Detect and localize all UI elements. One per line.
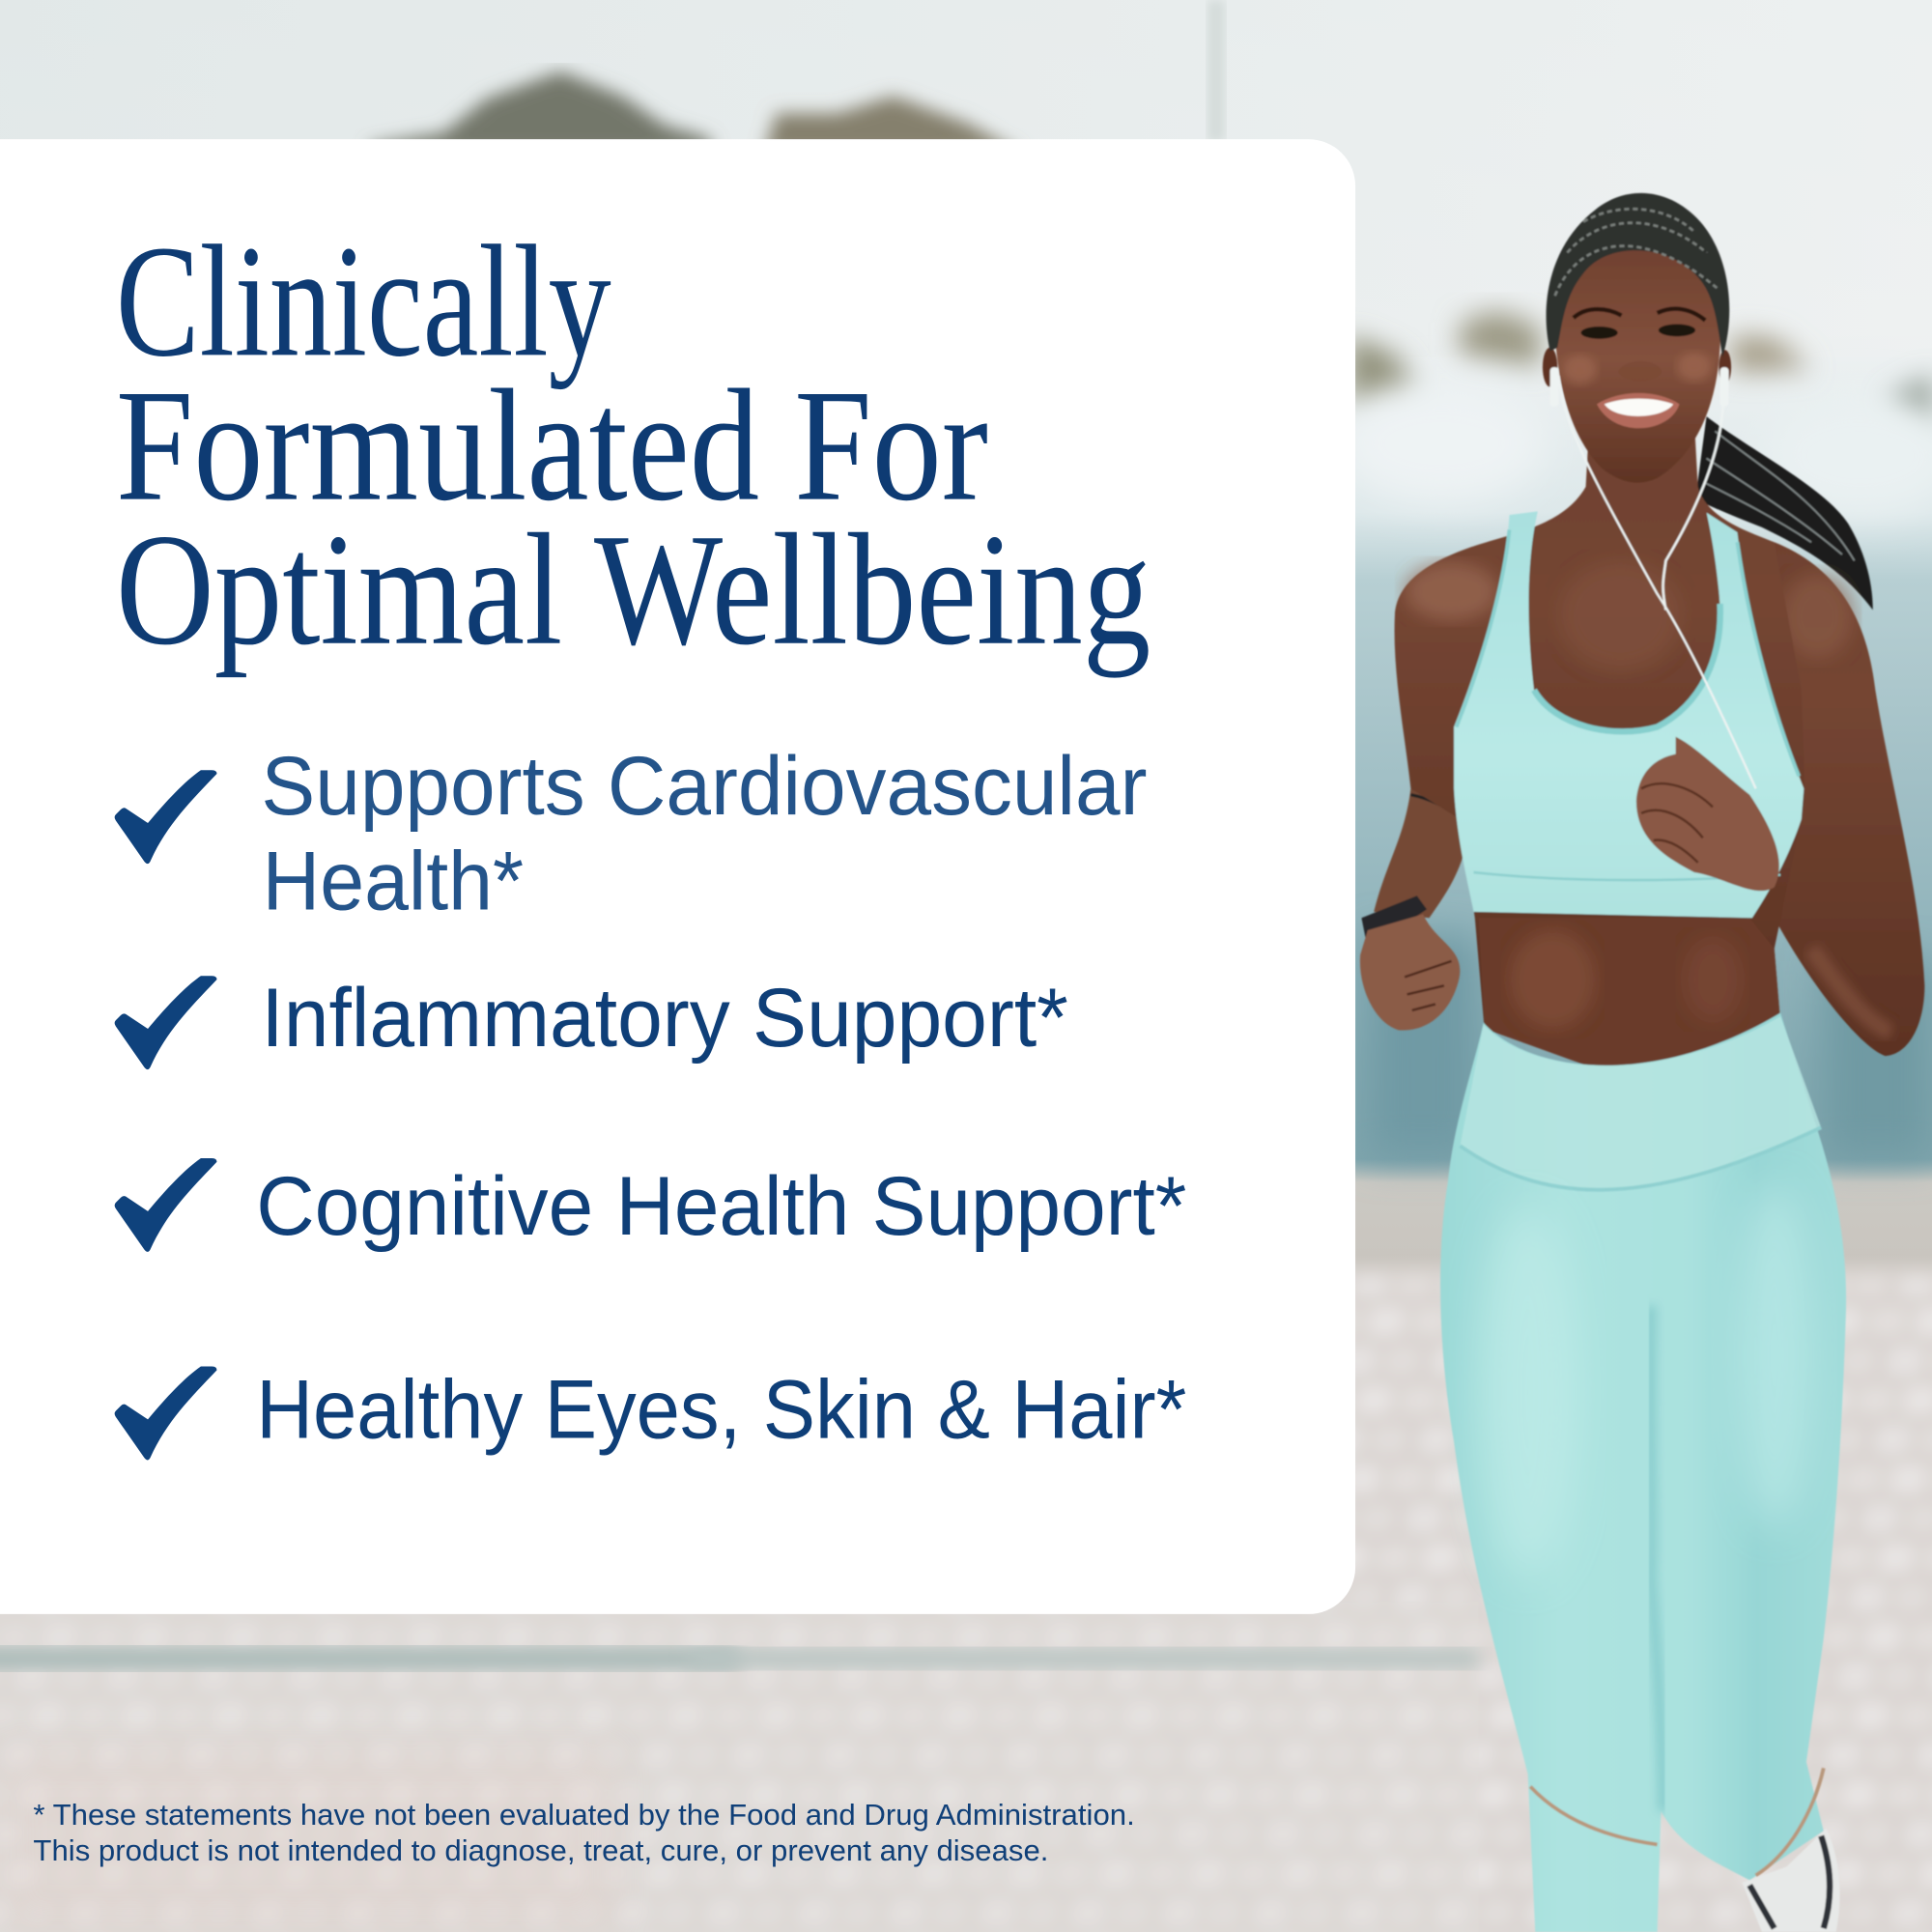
smile — [1597, 393, 1680, 428]
benefit: cardiovascular: Supports Cardiovascular — [261, 739, 1147, 833]
heading — [116, 212, 1151, 678]
near arm — [1707, 542, 1924, 1056]
benefit: eyes skin hair: Healthy Eyes, Skin & Hair* — [256, 1363, 1186, 1457]
footnote disclaimer: This product is not intended to diagnose, treat, cure, or prevent any disease. — [33, 1834, 1048, 1867]
benefit: cardiovascular line 2: Health* — [263, 834, 524, 927]
torso and midriff — [1395, 419, 1805, 1084]
running shoe — [1743, 1829, 1839, 1932]
earphone wires — [1550, 367, 1756, 788]
nose — [1618, 361, 1662, 382]
heading: Clinically — [116, 212, 611, 389]
footnote disclaimer: * These statements have not been evaluated by the Food and Drug Administration. — [33, 1799, 1135, 1832]
near hand fist — [1636, 737, 1779, 891]
eyes, brows — [1574, 309, 1705, 321]
icon: check mark 2 — [115, 976, 216, 1069]
benefit: cognitive: Cognitive Health Support* — [256, 1159, 1186, 1253]
far arm and fist — [1360, 788, 1468, 1031]
photo: woman jogging — [1360, 193, 1924, 1932]
leggings — [1440, 1012, 1846, 1932]
heading: Formulated For — [116, 356, 988, 534]
icon: check mark 3 — [115, 1158, 216, 1252]
icon: check mark 1 — [115, 770, 216, 864]
heading: Optimal Wellbeing — [116, 500, 1151, 678]
braided hair — [1547, 193, 1729, 357]
footnote disclaimer — [33, 1799, 1135, 1867]
head — [1543, 193, 1731, 483]
ponytail braids — [1695, 416, 1873, 610]
panel: white benefits card — [0, 139, 1355, 1614]
icon: check mark 4 — [115, 1367, 216, 1460]
sports bra — [1454, 511, 1804, 918]
benefit: inflammatory: Inflammatory Support* — [261, 971, 1068, 1065]
